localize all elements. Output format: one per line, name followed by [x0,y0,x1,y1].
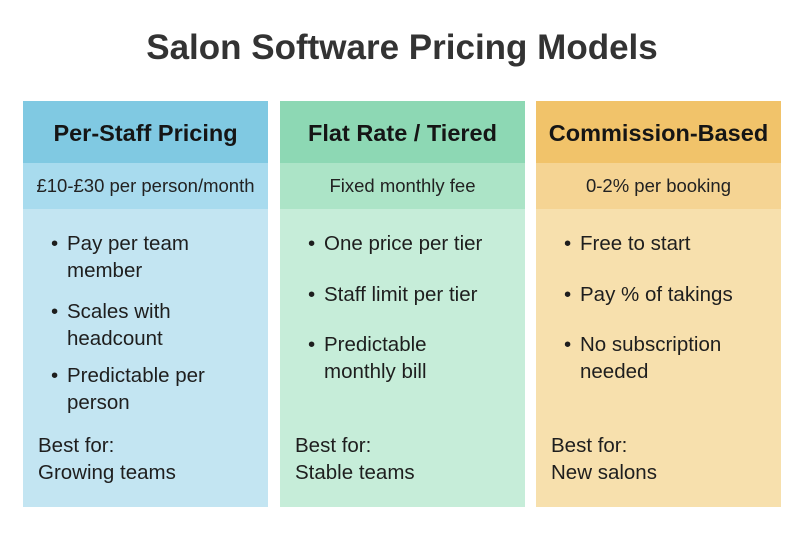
bullet: No subscription [580,333,721,356]
panel: commission: • [564,283,571,306]
bullet [51,300,171,350]
panel: commission [536,101,781,507]
bullet: headcount [67,327,163,350]
best for [38,434,176,484]
panel: flat rate: • [308,232,315,255]
panel: per-staff: • [51,364,58,387]
bullet: Pay % of takings [580,283,733,306]
header: Flat Rate / Tiered [308,120,497,146]
panel: per-staff: • [51,232,58,255]
best for: Best for: [38,434,114,457]
bullet: Free to start [580,232,691,255]
bullet [51,364,205,414]
panel: flat rate [280,101,525,507]
price [280,163,525,209]
panel: flat rate: • [308,333,315,356]
best for: New salons [551,461,657,484]
best for: Growing teams [38,461,176,484]
panel: per-staff: • [51,300,58,323]
header: Commission-Based [549,120,768,146]
best for: Best for: [551,434,627,457]
price: Fixed monthly fee [329,175,476,196]
best for [551,434,657,484]
bullet: Staff limit per tier [324,283,477,306]
bullet: Predictable [324,333,427,356]
header [536,101,781,163]
bullet [51,232,189,282]
header: Per-Staff Pricing [53,120,238,146]
bullet: needed [580,360,648,383]
bullet: Predictable per [67,364,205,387]
best for [295,434,415,484]
best for: Best for: [295,434,371,457]
panel: commission: • [564,232,571,255]
title: Salon Software Pricing Models [146,28,658,67]
price: £10-£30 per person/month [36,175,255,196]
bullet [308,333,427,383]
header [23,101,268,163]
bullet: Pay per team [67,232,189,255]
bullet: monthly bill [324,360,427,383]
bullet: Scales with [67,300,171,323]
panel: commission: • [564,333,571,356]
panel: per-staff [23,101,268,507]
header [280,101,525,163]
bullet: member [67,259,142,282]
bullet: person [67,391,130,414]
price [23,163,268,209]
price [536,163,781,209]
bullet [564,333,721,383]
panel: flat rate: • [308,283,315,306]
price: 0-2% per booking [586,175,731,196]
best for: Stable teams [295,461,415,484]
bullet: One price per tier [324,232,482,255]
